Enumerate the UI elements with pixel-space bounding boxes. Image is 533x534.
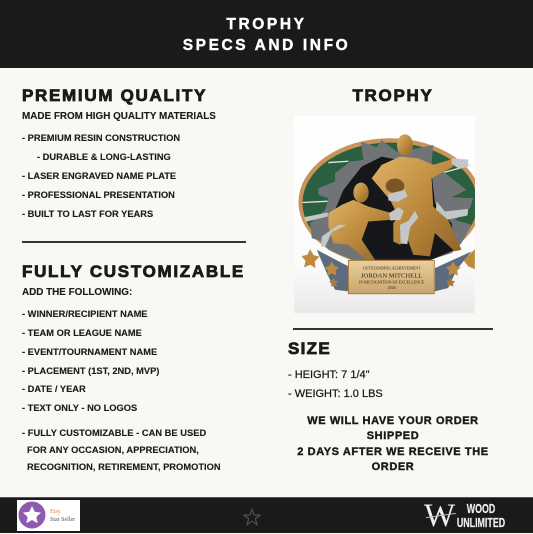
list: premium features: - DURABLE & LONG-LASTING: [37, 152, 171, 162]
heading: fully customizable: FULLY CUSTOMIZABLE: [22, 262, 245, 281]
player figures: [328, 134, 462, 260]
logo: wood unlimited: W: [424, 498, 455, 534]
header band: [0, 0, 533, 68]
heading: trophy: TROPHY: [352, 86, 434, 105]
logo: wood unlimited: UNLIMITED: [457, 516, 505, 530]
list: customization options: - DATE / YEAR: [22, 384, 86, 394]
shipping note: 2 DAYS AFTER WE RECEIVE THE: [297, 446, 489, 458]
silver hands and flags: [304, 158, 468, 247]
list: premium features: - LASER ENGRAVED NAME PLATE: [22, 171, 176, 181]
name plate: 2026: [388, 285, 396, 290]
subheading: add the following: ADD THE FOLLOWING:: [22, 287, 132, 298]
badge: etsy star seller: Star Seller: [50, 517, 75, 523]
list: premium features: - PREMIUM RESIN CONSTRUCTION: [22, 133, 180, 143]
heading: premium quality: PREMIUM QUALITY: [22, 86, 207, 105]
icon: star: [243, 508, 261, 526]
list: size specs: - HEIGHT: 7 1/4": [288, 369, 370, 381]
list: customization options: - EVENT/TOURNAMENT NAME: [22, 347, 157, 357]
shipping note: SHIPPED: [367, 430, 419, 442]
list: customization options: - FULLY CUSTOMIZABLE - CAN BE USED: [22, 428, 206, 438]
header band: TROPHY: [226, 16, 307, 33]
list: premium features: - PROFESSIONAL PRESENTATION: [22, 190, 175, 200]
image: trophy: [294, 116, 475, 313]
list: customization options: - TEXT ONLY - NO LOGOS: [22, 403, 137, 413]
badge: etsy star seller: [17, 500, 80, 531]
list: customization options: [22, 309, 221, 472]
torn background: [310, 140, 473, 261]
list: size specs: - WEIGHT: 1.0 LBS: [288, 388, 383, 400]
subheading: materials: MADE FROM HIGH QUALITY MATERIALS: [22, 111, 216, 122]
list: premium features: [22, 133, 180, 219]
shipping note: WE WILL HAVE YOUR ORDER: [307, 415, 479, 427]
name plate: JORDAN MITCHELL: [361, 272, 422, 279]
panel: fully customizable: [22, 262, 245, 472]
name plate: OUTSTANDING ACHIEVEMENT: [363, 265, 421, 270]
logo: wood unlimited: [424, 498, 505, 534]
logo: wood unlimited: WOOD: [467, 502, 495, 516]
list: customization options: - PLACEMENT (1ST, 2ND, MVP): [22, 366, 159, 376]
panel: premium quality: [22, 86, 246, 243]
footer band: [0, 497, 533, 533]
name plate: [348, 260, 434, 294]
base with stars: [301, 249, 475, 291]
header band: SPECS AND INFO: [183, 37, 350, 54]
list: customization options: - WINNER/RECIPIENT NAME: [22, 309, 148, 319]
list: customization options: RECOGNITION, RETIREMENT, PROMOTION: [27, 462, 221, 472]
list: customization options: FOR ANY OCCASION, APPRECIATION,: [27, 445, 199, 455]
heading: size: SIZE: [288, 339, 331, 358]
badge: etsy star seller: Etsy: [50, 509, 61, 515]
name plate: IN RECOGNITION OF EXCELLENCE: [359, 280, 425, 285]
shipping note: [297, 415, 489, 473]
list: customization options: - TEAM OR LEAGUE NAME: [22, 328, 142, 338]
shipping note: ORDER: [372, 461, 414, 473]
list: premium features: - BUILT TO LAST FOR YEARS: [22, 209, 153, 219]
oval plaque: [298, 138, 482, 266]
list: size specs: [288, 369, 383, 400]
